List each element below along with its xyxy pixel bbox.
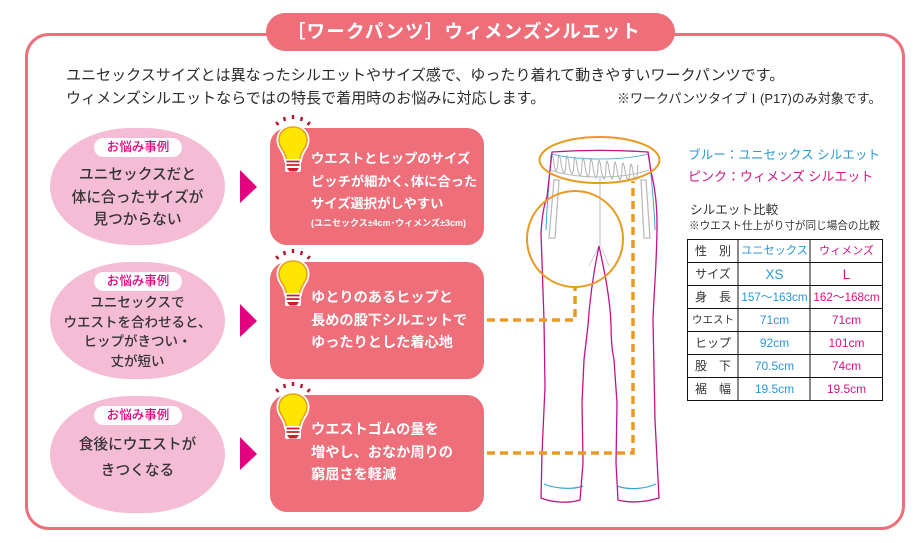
case 1 text: 体に合ったサイズが <box>72 190 203 206</box>
solution 1 note: (ユニセックス±4cm･ウィメンズ±3cm) <box>311 218 466 228</box>
solution 3 text: 窮屈さを軽減 <box>311 467 396 483</box>
comparison table <box>687 239 883 401</box>
icon: light bulb 3 <box>276 382 310 439</box>
case 2 text: 丈が短い <box>110 354 164 368</box>
intro text <box>66 67 784 106</box>
case 3 badge: お悩み事例 <box>107 408 169 422</box>
legend: blue: ブルー：ユニセックス シルエット <box>688 148 880 162</box>
case 3 text: きつくなる <box>101 463 174 479</box>
blue silhouette <box>546 155 655 230</box>
row: inseam <box>695 359 861 373</box>
dashed connector: waist <box>487 181 633 453</box>
pants illustration <box>541 150 659 502</box>
solution box 2 <box>270 262 484 379</box>
row: hip: 101cm <box>828 336 865 350</box>
row: hem width: 裾 幅 <box>695 382 731 396</box>
title banner <box>266 13 675 51</box>
table note: ※ウエスト仕上がり寸が同じ場合の比較 <box>689 220 880 232</box>
intro text: ウィメンズシルエットならではの特長で着用時のお悩みに対応します。 <box>66 90 545 106</box>
row: hip <box>695 336 865 350</box>
case 1 text: ユニセックスだと <box>79 167 196 183</box>
solution 2 text: 長めの股下シルエットで <box>311 312 467 328</box>
case 1 text: 見つからない <box>93 212 182 228</box>
row: gender: ウィメンズ <box>819 245 874 257</box>
row: hem width: 19.5cm <box>827 382 866 396</box>
legend: pink: ピンク：ウィメンズ シルエット <box>688 169 873 184</box>
solution 1 text: ウエストとヒップのサイズ <box>311 151 470 166</box>
row: waist: 71cm <box>760 313 789 327</box>
pockets <box>549 180 650 238</box>
highlight circle: hip <box>527 191 623 287</box>
row: height: 身 長 <box>695 290 731 304</box>
case 3 badge <box>94 406 182 425</box>
row: height <box>695 290 880 304</box>
row: waist <box>692 313 861 327</box>
solution 1 text <box>311 151 477 211</box>
row: size: サイズ <box>695 267 731 281</box>
row: height: 157～163cm <box>741 291 808 304</box>
waistband gathers <box>552 155 638 180</box>
highlight ellipse: waist <box>540 137 660 183</box>
row: size <box>695 267 850 282</box>
row: gender: ユニセックス <box>741 245 808 257</box>
case 2 badge: お悩み事例 <box>107 274 169 288</box>
table heading: シルエット比較 <box>690 203 778 217</box>
case 2 text: ヒップがきつい・ <box>84 334 192 349</box>
row: hem width <box>695 382 866 396</box>
row: size: XS <box>765 267 784 282</box>
case 3 text <box>79 436 196 479</box>
solution box 1 <box>270 128 484 245</box>
solution 2 text: ゆとりのあるヒップと <box>311 290 453 306</box>
row: gender <box>695 244 874 258</box>
grid lines <box>688 240 882 400</box>
row: waist: 71cm <box>832 313 861 327</box>
case 1 badge: お悩み事例 <box>107 140 169 154</box>
row: hem width: 19.5cm <box>755 382 794 396</box>
pink outline <box>541 150 659 502</box>
solution 2 text <box>311 290 467 351</box>
footnote: target type: ※ワークパンツタイプⅠ(P17)のみ対象です。 <box>617 91 882 106</box>
solution box 3 <box>270 395 484 512</box>
case 2 text <box>64 295 211 368</box>
blue hems <box>544 484 656 489</box>
solution 1 text: サイズ選択がしやすい <box>311 196 443 211</box>
arrow 2 <box>240 304 257 337</box>
dashed connector: hip <box>487 287 575 320</box>
center seam <box>599 176 601 246</box>
case 3 oval <box>50 396 225 513</box>
case 2 text: ユニセックスで <box>90 295 185 310</box>
arrow 3 <box>240 437 257 470</box>
row: waist: ウエスト <box>692 314 734 326</box>
row: inseam: 74cm <box>832 359 861 373</box>
solution 3 text: 増やし、おなか周りの <box>311 444 453 460</box>
arrow 1 <box>240 170 257 203</box>
row: hip: ヒップ <box>695 336 731 350</box>
row: height: 162～168cm <box>813 291 880 304</box>
row: gender: 性 別 <box>695 244 731 258</box>
solution 2 text: ゆったりとした着心地 <box>311 335 453 351</box>
row: size: L <box>843 267 850 282</box>
case 1 text <box>72 166 203 228</box>
row: hip: 92cm <box>760 336 789 350</box>
row: inseam: 70.5cm <box>755 359 794 373</box>
case 1 oval <box>50 128 225 245</box>
case 1 badge <box>94 138 182 157</box>
case 2 oval <box>50 262 225 379</box>
row: inseam: 股 下 <box>695 359 731 373</box>
intro text: ユニセックスサイズとは異なったシルエットやサイズ感で、ゆったり着れて動きやすいワークパンツです。 <box>66 67 784 84</box>
solution 1 text: ピッチが細かく､体に合った <box>311 174 477 188</box>
solution 3 text <box>311 422 453 483</box>
case 3 text: 食後にウエストが <box>79 437 196 453</box>
case 2 text: ウエストを合わせると、 <box>64 314 211 330</box>
icon: light bulb 2 <box>276 249 310 306</box>
solution 3 text: ウエストゴムの量を <box>311 422 439 438</box>
icon: light bulb 1 <box>276 115 310 172</box>
case 2 badge <box>94 272 182 291</box>
title banner: ［ワークパンツ］ウィメンズシルエット <box>287 21 641 42</box>
